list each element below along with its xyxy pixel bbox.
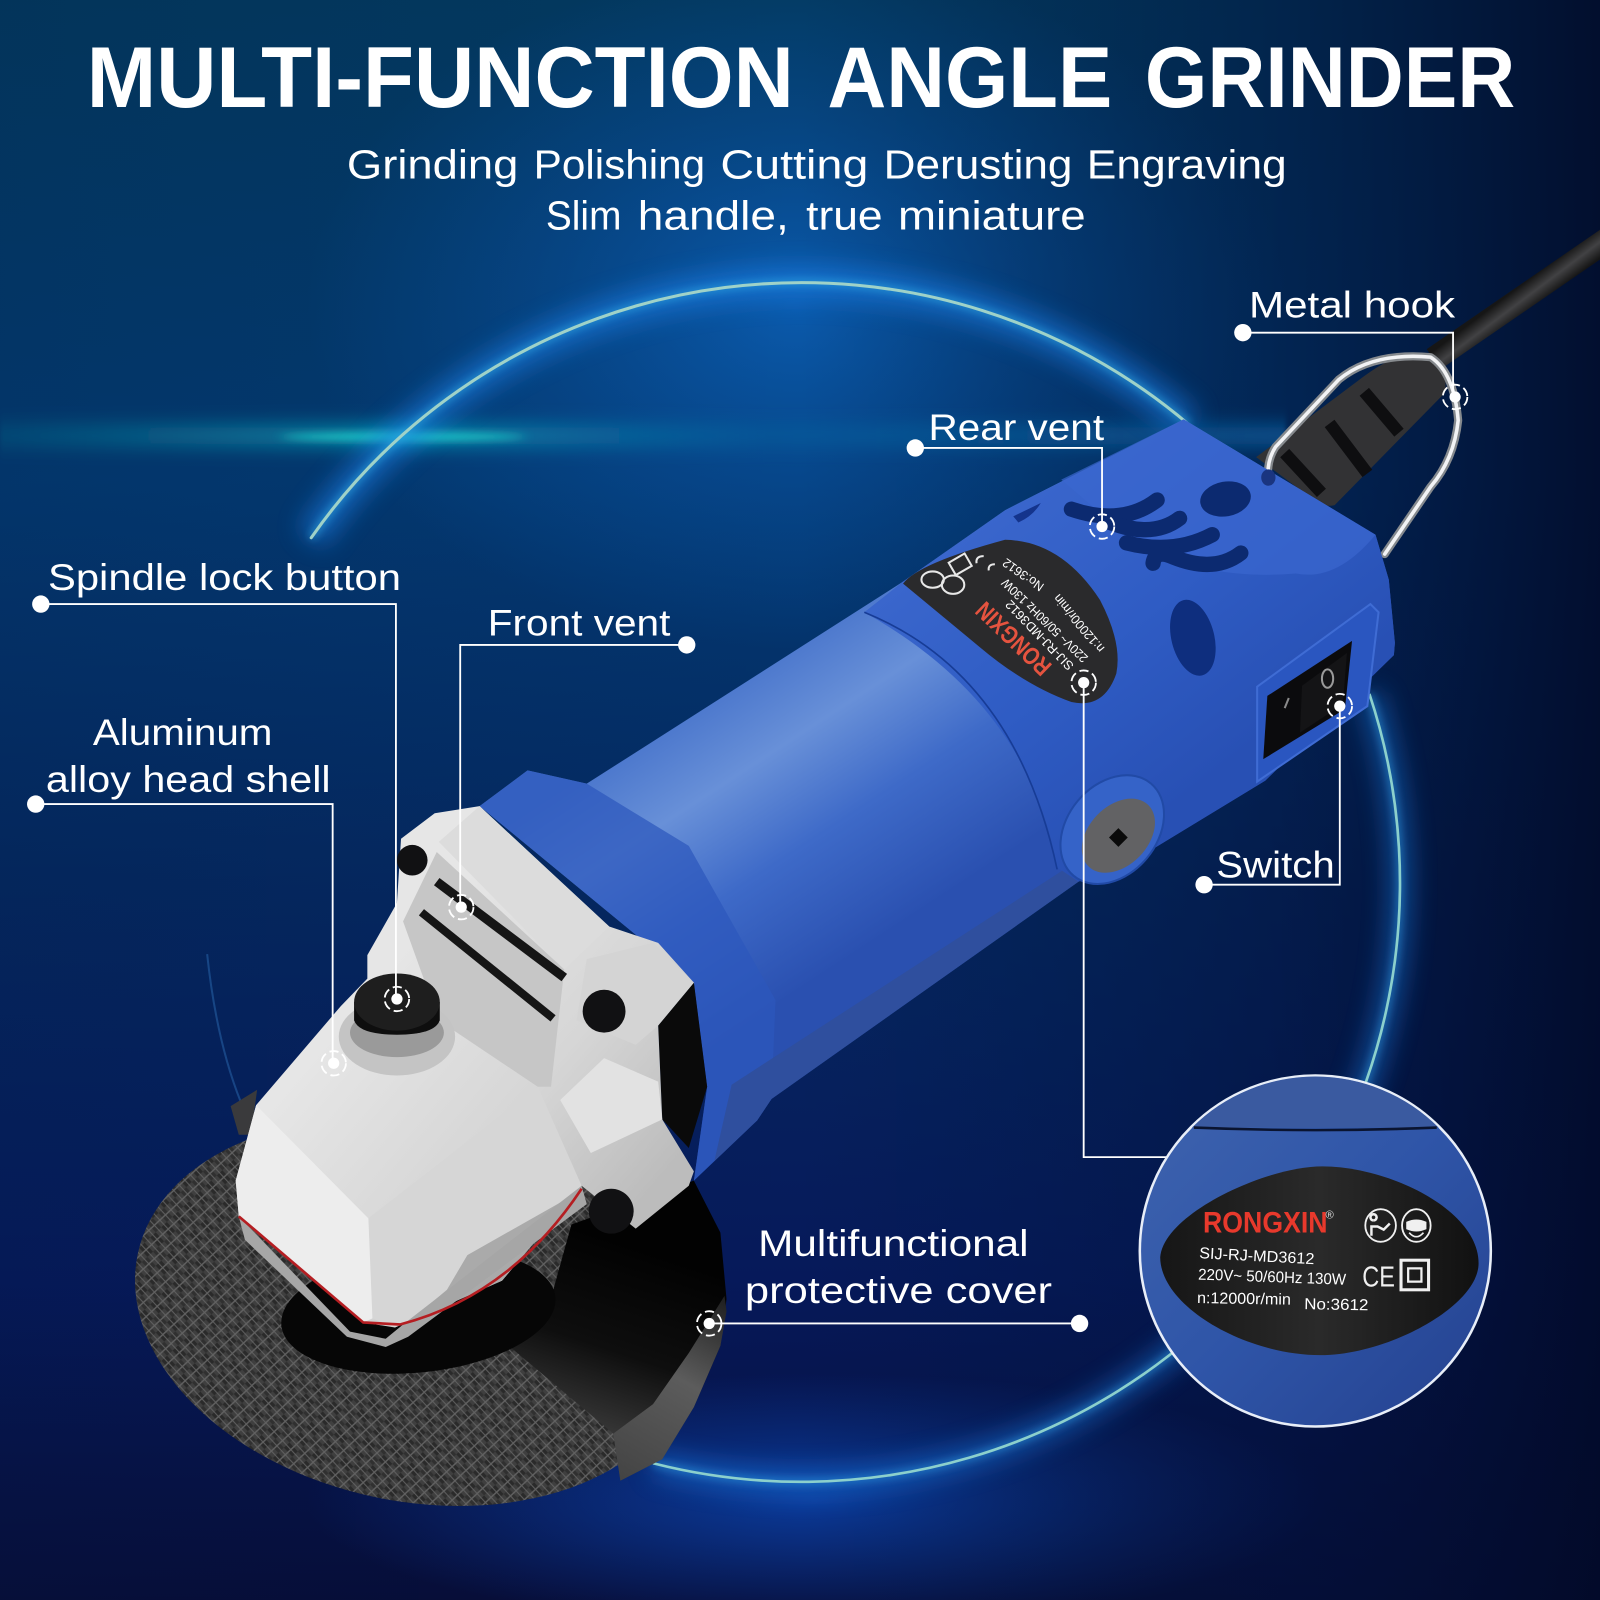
screws — [397, 845, 634, 1234]
callout: Front vent — [449, 603, 695, 919]
subtitle: Grinding — [347, 142, 518, 188]
subtitle: true — [806, 193, 883, 239]
callout: Aluminum alloy head shell: alloy head shell — [46, 759, 331, 800]
underside shade — [714, 867, 1079, 1161]
body shell — [480, 419, 1395, 1181]
spindle collar — [1039, 755, 1185, 905]
faint left arc — [207, 954, 241, 1102]
callout: Metal hook: Metal hook — [1249, 284, 1456, 325]
inset CE mark: CE — [1362, 1262, 1395, 1294]
callout: rating label leader — [1071, 670, 1168, 1157]
front facet — [236, 1105, 372, 1322]
sticker logo: RONGXIN — [971, 596, 1057, 680]
front vent slots — [421, 882, 564, 1018]
round vent hole — [1197, 477, 1254, 520]
aluminum head — [236, 806, 707, 1347]
rear block — [864, 419, 1395, 882]
inset spec text: No:3612 — [1304, 1296, 1369, 1314]
callout: Multifunctional protective cover: Multifunctional — [758, 1223, 1029, 1264]
abrasive disc — [99, 1069, 728, 1555]
callout: Spindle lock button — [32, 557, 409, 1011]
callout: Metal hook — [1234, 284, 1467, 409]
callout: Multifunctional protective cover — [697, 1223, 1088, 1336]
side vent slot — [1163, 595, 1223, 681]
inset spec text: 220V~ 50/60Hz 130W — [1198, 1267, 1346, 1289]
upper ribbed band — [439, 806, 609, 969]
sticker specs: SIJ-RJ-MD3612 — [1002, 597, 1077, 674]
gap behind head — [658, 983, 707, 1148]
inset black label — [1160, 1166, 1479, 1355]
upper rear face highlight — [1061, 419, 1376, 575]
subtitle: handle, — [638, 193, 789, 239]
title: ANGLE — [828, 29, 1112, 126]
spindle lock button — [339, 973, 455, 1076]
rear tab of cover — [231, 1090, 257, 1135]
inset registered mark: ® — [1326, 1209, 1335, 1221]
sticker specs: n:12000r/min — [1050, 591, 1107, 656]
power cord — [1434, 233, 1600, 359]
rocker switch — [1263, 641, 1352, 759]
metal hook — [1268, 356, 1458, 554]
upper gearbox face — [403, 852, 564, 1087]
subtitle: Cutting — [720, 142, 868, 188]
callout: Aluminum alloy head shell — [27, 712, 346, 1076]
strain relief — [1256, 353, 1446, 506]
subtitle: Polishing — [534, 142, 705, 188]
horizontal light streak — [0, 427, 1286, 445]
switch bezel — [1257, 604, 1379, 782]
subtitle: Engraving — [1087, 142, 1287, 188]
right ear — [577, 943, 694, 1045]
inset spec text: n:12000r/min — [1197, 1290, 1291, 1309]
inset spec text: SIJ-RJ-MD3612 — [1199, 1245, 1315, 1268]
subtitle: Slim — [546, 193, 621, 239]
title: GRINDER — [1145, 29, 1515, 126]
inset brand logo: RONGXIN — [1203, 1207, 1328, 1240]
callout: Spindle lock button: Spindle lock button — [48, 557, 401, 598]
rear vent slots — [1071, 500, 1241, 564]
callout: Switch: Switch — [1216, 845, 1335, 886]
sticker specs — [998, 555, 1107, 674]
subtitle: Derusting — [884, 142, 1072, 188]
inset safety icons — [1365, 1209, 1431, 1242]
right boss — [560, 1058, 662, 1153]
ring right and bottom arc — [653, 694, 1400, 1482]
callout: Front vent: Front vent — [488, 603, 670, 644]
hook mount hole — [1261, 469, 1276, 486]
lower silver band and red line — [239, 1186, 587, 1347]
callout: Rear vent — [907, 407, 1114, 539]
inset: rating label magnified — [1140, 1071, 1491, 1427]
lower right facet — [368, 1087, 582, 1328]
sticker safety icons — [921, 554, 995, 594]
inset spec text — [1197, 1245, 1369, 1314]
protective cover — [504, 1181, 727, 1481]
inset double-insulation mark — [1401, 1260, 1429, 1290]
blue body — [480, 419, 1395, 1181]
ring top arc — [311, 283, 1189, 538]
head shell — [236, 806, 694, 1328]
front flange shading — [480, 770, 776, 1181]
callout: Aluminum alloy head shell: Aluminum — [93, 712, 272, 753]
angle grinder product — [99, 233, 1600, 1555]
sticker specs: No:3612 — [1000, 555, 1047, 595]
sticker specs: 220V~ 50/60Hz 130W — [998, 576, 1091, 666]
callout: Switch — [1195, 694, 1352, 893]
subtitle: miniature — [898, 193, 1086, 239]
rating sticker on body — [903, 540, 1118, 703]
glowing ring — [0, 283, 1400, 1482]
callout: Rear vent: Rear vent — [929, 407, 1104, 448]
title: MULTI-FUNCTION — [87, 29, 794, 126]
subtitle — [347, 142, 1287, 239]
small side vent — [1013, 503, 1041, 522]
callout: Multifunctional protective cover: protective cover — [745, 1270, 1052, 1311]
bottom flange nut — [275, 1236, 562, 1387]
title — [87, 29, 1515, 126]
